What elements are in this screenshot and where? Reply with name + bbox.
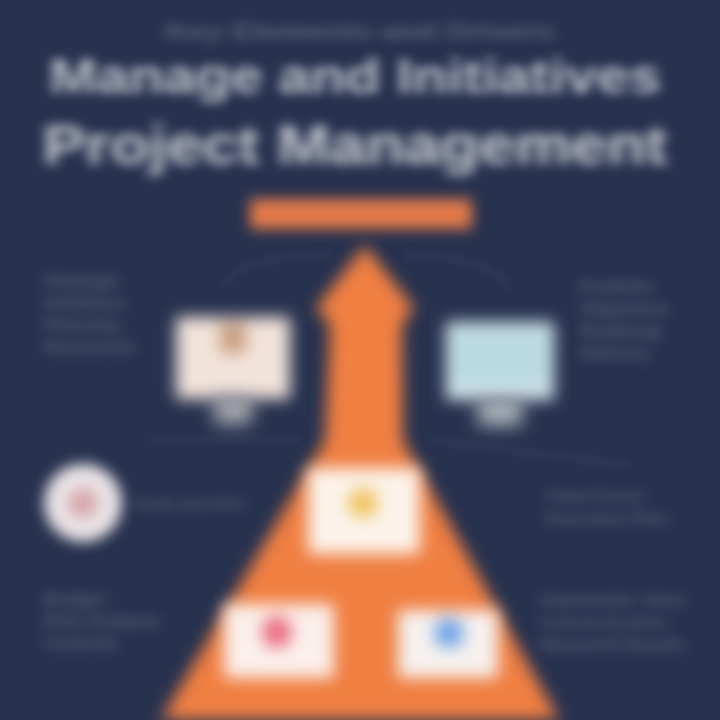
pyramid top card xyxy=(308,468,420,554)
icon: right monitor panel xyxy=(446,322,554,400)
overline text: Key Elements and Drivers xyxy=(166,18,554,46)
icon: yellow marker xyxy=(348,488,378,518)
monitor screen xyxy=(454,330,546,384)
icon: blue marker xyxy=(434,618,464,648)
icon detail xyxy=(220,323,246,353)
title line one: Manage and Initiatives xyxy=(49,50,661,104)
left panel base xyxy=(214,396,252,424)
orange subtitle bar xyxy=(250,199,472,229)
pyramid right card xyxy=(398,610,498,678)
bottom right text block: Stakeholder Value Communication Measured Results xyxy=(540,591,686,654)
top right text block: Portfolio Alignment Roadmap Delivery xyxy=(580,277,668,363)
icon: left circle badge xyxy=(44,464,122,542)
icon: left document panel xyxy=(176,317,290,399)
top left text block: Strategic Initiatives Planning Resources xyxy=(44,271,136,357)
middle right label: Team Focus Execution Plan xyxy=(546,487,668,528)
bottom left text block: Budget Risk Analysis Controls xyxy=(44,589,160,653)
right panel base xyxy=(478,398,522,426)
middle left label: Goals and KPIs xyxy=(134,496,244,513)
badge center xyxy=(68,488,98,518)
icon: pink marker xyxy=(262,616,292,648)
title line two: Project Management xyxy=(43,113,667,176)
pyramid left card xyxy=(224,604,334,678)
